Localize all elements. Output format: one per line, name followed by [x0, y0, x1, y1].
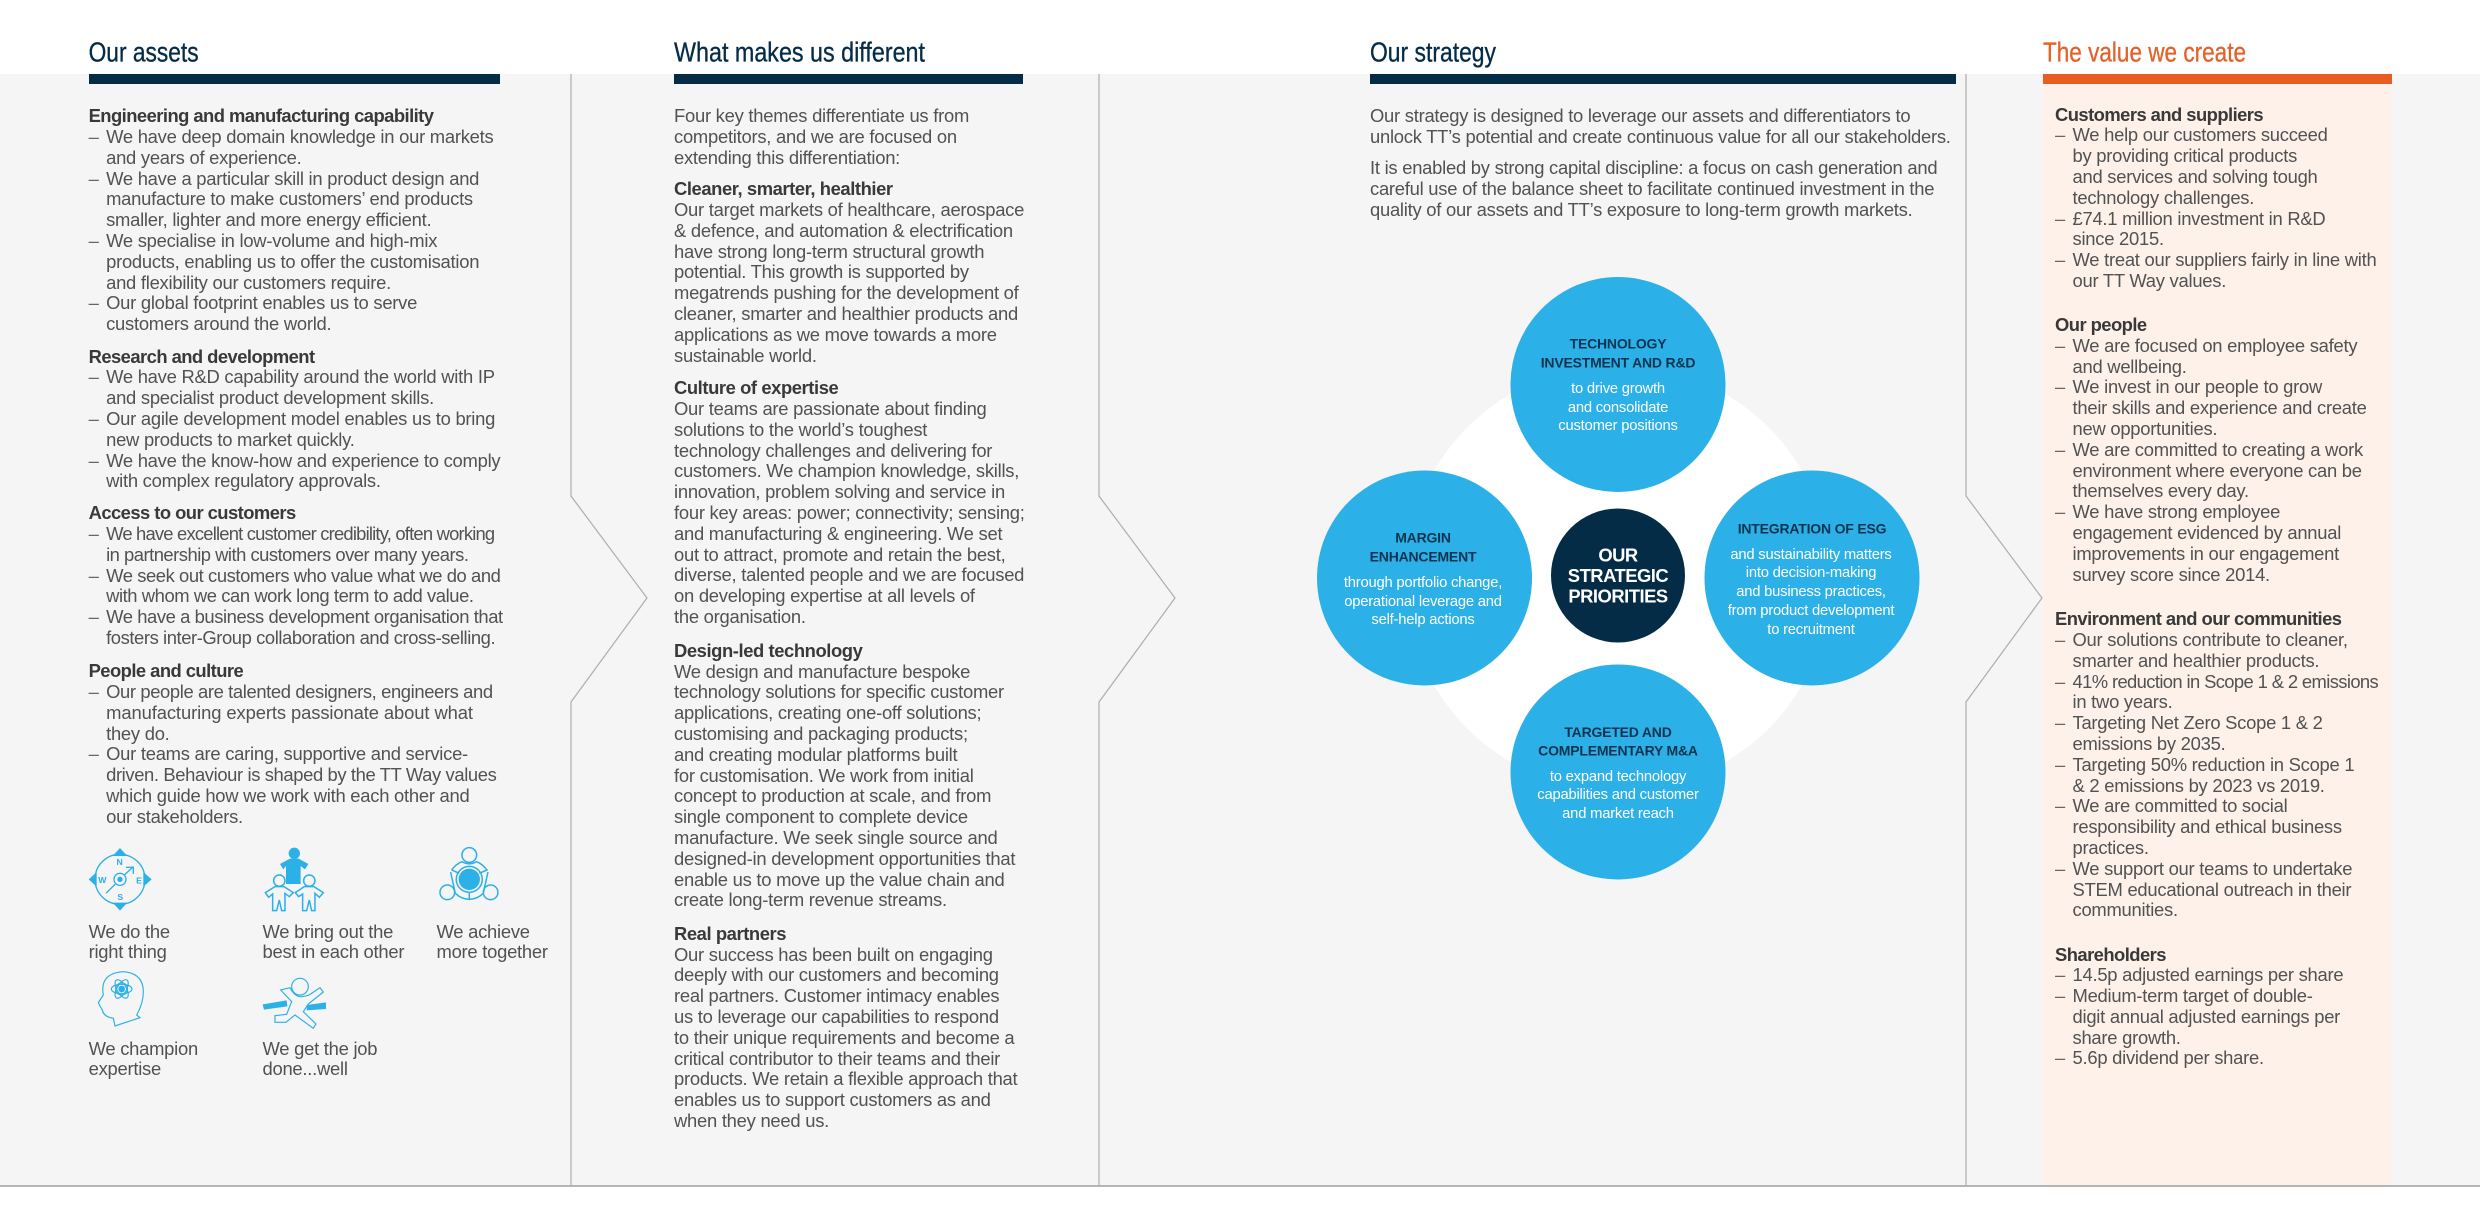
- centre: our strategic priorities: PRIORITIES: [1568, 586, 1668, 606]
- text block: cleaner, smarter, healthier: have strong long-term structural growth: [674, 241, 984, 262]
- text block: our people: –: [2055, 376, 2065, 397]
- caption: we get the job done well: We get the job: [262, 1038, 377, 1059]
- text block: our people: environment where everyone can be: [2072, 460, 2362, 481]
- text block: design-led technology: We design and manufacture bespoke: [674, 661, 970, 682]
- circle: technology investment: INVESTMENT AND R&D: [1541, 354, 1695, 370]
- text block: culture of expertise: on developing expertise at all levels of: [674, 585, 975, 606]
- text block: environment and our communities: –: [2055, 712, 2065, 733]
- text block: capital discipline: careful use of the balance sheet to facilitate continued investment in the: [1370, 178, 1934, 199]
- text block: people and culture: they do.: [106, 723, 170, 744]
- text block: strategy intro: [1370, 105, 1951, 147]
- text block: real partners: us to leverage our capabilities to respond: [674, 1006, 999, 1027]
- text block: shareholders: –: [2055, 1047, 2065, 1068]
- text block: culture of expertise: Our teams are passionate about finding: [674, 398, 987, 419]
- text block: design-led technology: create long-term revenue streams.: [674, 889, 947, 910]
- text block: culture of expertise: [674, 377, 1025, 627]
- text block: capital discipline: [1370, 157, 1937, 220]
- text block: real partners: products. We retain a flexible approach that: [674, 1068, 1017, 1089]
- caption: we achieve more together: more together: [436, 941, 548, 962]
- text block: real partners: deeply with our customers and becoming: [674, 964, 999, 985]
- text block: access to our customers: –: [89, 606, 98, 627]
- text block: people and culture: Our teams are caring, supportive and service-: [106, 743, 468, 764]
- caption: we achieve more together: [436, 921, 548, 962]
- text block: research and development: and specialist product development skills.: [106, 387, 434, 408]
- text block: environment and our communities: STEM educational outreach in their: [2072, 879, 2351, 900]
- text block: customers and suppliers: We treat our suppliers fairly in line with: [2072, 249, 2376, 270]
- text block: cleaner, smarter, healthier: megatrends pushing for the development of: [674, 282, 1019, 303]
- icon: compass: S: [117, 892, 123, 902]
- text block: cleaner, smarter, healthier: Our target markets of healthcare, aerospace: [674, 199, 1024, 220]
- text block: shareholders: 5.6p dividend per share.: [2072, 1047, 2264, 1068]
- text block: people and culture: [88, 660, 496, 827]
- circle: margin enhancement: self-help actions: [1371, 612, 1475, 628]
- text block: environment and our communities: –: [2055, 671, 2065, 692]
- text block: research and development: –: [89, 408, 99, 429]
- text block: people and culture: Our people are talented designers, engineers and: [106, 681, 493, 702]
- text block: access to our customers: Access to our customers: [89, 502, 296, 523]
- text block: design-led technology: single component to complete device: [674, 806, 968, 827]
- text block: real partners: to their unique requirements and become a: [674, 1027, 1014, 1048]
- circle: margin enhancement: [1317, 470, 1532, 686]
- text block: customers and suppliers: Customers and suppliers: [2055, 104, 2263, 125]
- text block: people and culture: driven. Behaviour is shaped by the TT Way values: [106, 764, 496, 785]
- icon: compass: W: [98, 875, 107, 885]
- text block: access to our customers: with whom we can work long term to add value.: [106, 585, 474, 606]
- text block: customers and suppliers: our TT Way values.: [2072, 270, 2226, 291]
- text block: environment and our communities: [2055, 608, 2378, 920]
- text block: research and development: Our agile development model enables us to bring: [106, 408, 495, 429]
- text block: environment and our communities: Targeting 50% reduction in Scope 1: [2072, 754, 2354, 775]
- text block: real partners: real partners. Customer intimacy enables: [674, 985, 999, 1006]
- text block: culture of expertise: customers. We champion knowledge, skills,: [674, 460, 1019, 481]
- circle: targeted m&a: to expand technology: [1550, 769, 1687, 785]
- text block: customers and suppliers: £74.1 million investment in R&D: [2072, 208, 2325, 229]
- text block: people and culture: which guide how we work with each other and: [106, 785, 470, 806]
- caption: we bring out the best in each other: best in each other: [262, 941, 404, 962]
- text block: customers and suppliers: by providing critical products: [2072, 145, 2297, 166]
- text block: engineering and manufacturing capability: We specialise in low-volume and high-mix: [106, 230, 437, 251]
- text block: engineering and manufacturing capability: –: [89, 230, 99, 251]
- circle: technology investment: [1510, 277, 1726, 492]
- text block: differentiators intro: extending this differentiation:: [674, 147, 900, 168]
- text block: our people: new opportunities.: [2072, 418, 2217, 439]
- text block: culture of expertise: diverse, talented people and we are focused: [674, 564, 1024, 585]
- text block: customers and suppliers: and services and solving tough: [2072, 166, 2318, 187]
- caption: we bring out the best in each other: We bring out the: [262, 921, 393, 942]
- text block: our people: engagement evidenced by annual: [2072, 522, 2341, 543]
- text block: engineering and manufacturing capability: [88, 105, 493, 334]
- text block: access to our customers: in partnership with customers over many years.: [106, 544, 468, 565]
- text block: our people: We have strong employee: [2072, 501, 2280, 522]
- heading: what makes us different: What makes us different: [674, 36, 925, 68]
- text block: access to our customers: We have a business development organisation that: [106, 606, 503, 627]
- text block: our people: –: [2055, 335, 2065, 356]
- text block: cleaner, smarter, healthier: [674, 178, 1024, 366]
- text block: culture of expertise: innovation, problem solving and service in: [674, 481, 1005, 502]
- text block: people and culture: manufacturing experts passionate about what: [106, 702, 473, 723]
- circle: integration of esg: and sustainability matters: [1730, 547, 1892, 563]
- text block: engineering and manufacturing capability: customers around the world.: [106, 313, 331, 334]
- text block: our people: –: [2055, 439, 2065, 460]
- caption: we do the right thing: [88, 921, 170, 962]
- text block: our people: We invest in our people to grow: [2072, 376, 2322, 397]
- circle: margin enhancement: ENHANCEMENT: [1370, 548, 1477, 564]
- header bar: our assets: [89, 74, 500, 84]
- text block: engineering and manufacturing capability: We have a particular skill in product design and: [106, 168, 479, 189]
- text block: engineering and manufacturing capability: and years of experience.: [106, 147, 302, 168]
- text block: people and culture: People and culture: [89, 660, 243, 681]
- text block: differentiators intro: Four key themes differentiate us from: [674, 105, 969, 126]
- text block: engineering and manufacturing capability: manufacture to make customers’ end products: [106, 188, 473, 209]
- text block: access to our customers: We have excellent customer credibility, often working: [106, 523, 494, 544]
- text block: our people: survey score since 2014.: [2072, 564, 2270, 585]
- circle: integration of esg: from product development: [1728, 603, 1894, 619]
- text block: culture of expertise: out to attract, promote and retain the best,: [674, 544, 1005, 565]
- text block: customers and suppliers: –: [2055, 124, 2065, 145]
- text block: research and development: We have the know-how and experience to comply: [106, 450, 500, 471]
- text block: capital discipline: It is enabled by strong capital discipline: a focus on cash generation and: [1370, 157, 1937, 178]
- text block: cleaner, smarter, healthier: & defence, and automation & electrification: [674, 220, 1013, 241]
- text block: research and development: with complex regulatory approvals.: [106, 470, 381, 491]
- centre: our strategic priorities: STRATEGIC: [1568, 565, 1668, 586]
- circle: margin enhancement: MARGIN: [1395, 530, 1451, 546]
- text block: our people: and wellbeing.: [2072, 356, 2187, 377]
- text block: environment and our communities: Targeting Net Zero Scope 1 & 2: [2072, 712, 2323, 733]
- text block: research and development: [88, 346, 500, 491]
- text block: design-led technology: [674, 640, 1016, 910]
- circle: targeted m&a: COMPLEMENTARY M&A: [1538, 742, 1698, 758]
- text block: cleaner, smarter, healthier: potential. This growth is supported by: [674, 261, 969, 282]
- text block: environment and our communities: Our solutions contribute to cleaner,: [2072, 629, 2348, 650]
- text block: shareholders: –: [2055, 985, 2065, 1006]
- text block: environment and our communities: We support our teams to undertake: [2072, 858, 2352, 879]
- text block: engineering and manufacturing capability: –: [89, 292, 99, 313]
- text block: real partners: critical contributor to their teams and their: [674, 1048, 1000, 1069]
- text block: customers and suppliers: We help our customers succeed: [2072, 124, 2328, 145]
- text block: customers and suppliers: since 2015.: [2072, 228, 2164, 249]
- text block: environment and our communities: –: [2055, 629, 2065, 650]
- text block: cleaner, smarter, healthier: applications as we move towards a more: [674, 324, 997, 345]
- text block: our people: –: [2055, 501, 2065, 522]
- text block: customers and suppliers: [2055, 104, 2376, 291]
- text block: cleaner, smarter, healthier: sustainable world.: [674, 345, 817, 366]
- text block: culture of expertise: solutions to the world’s toughest: [674, 419, 927, 440]
- text block: design-led technology: technology solutions for specific customer: [674, 681, 1004, 702]
- text block: engineering and manufacturing capability: products, enabling us to offer the customisation: [106, 251, 479, 272]
- text block: design-led technology: and creating modular platforms built: [674, 744, 957, 765]
- text block: access to our customers: –: [89, 523, 98, 544]
- caption: we get the job done well: done...well: [262, 1058, 348, 1079]
- text block: strategy intro: Our strategy is designed to leverage our assets and differentiators to: [1370, 105, 1910, 126]
- text block: design-led technology: designed-in development opportunities that: [674, 848, 1015, 869]
- caption: we do the right thing: right thing: [89, 941, 167, 962]
- text block: capital discipline: quality of our assets and TT’s exposure to long-term growth markets.: [1370, 199, 1912, 220]
- text block: engineering and manufacturing capability: and flexibility our customers require.: [106, 272, 391, 293]
- panel: value tint: [2042, 84, 2392, 1185]
- centre: our strategic priorities: OUR: [1598, 544, 1638, 566]
- text block: environment and our communities: communities.: [2072, 899, 2178, 920]
- circle: targeted m&a: and market reach: [1562, 806, 1674, 822]
- text block: our people: We are committed to creating a work: [2072, 439, 2363, 460]
- caption: we do the right thing: We do the: [89, 921, 170, 942]
- text block: engineering and manufacturing capability: Engineering and manufacturing capability: [89, 105, 433, 126]
- text block: cleaner, smarter, healthier: cleaner, smarter and healthier products and: [674, 303, 1018, 324]
- circle: targeted m&a: [1510, 664, 1726, 880]
- text block: people and culture: our stakeholders.: [106, 806, 243, 827]
- text block: culture of expertise: four key areas: power; connectivity; sensing;: [674, 502, 1025, 523]
- text block: environment and our communities: –: [2055, 754, 2065, 775]
- circle: technology investment: customer positions: [1558, 418, 1678, 434]
- circle: integration of esg: into decision-making: [1746, 565, 1876, 581]
- text block: environment and our communities: smarter and healthier products.: [2072, 650, 2319, 671]
- text block: access to our customers: fosters inter-Group collaboration and cross-selling.: [106, 627, 495, 648]
- text block: shareholders: Medium-term target of double-: [2072, 985, 2313, 1006]
- header bar: our strategy: [1370, 74, 1956, 84]
- text block: environment and our communities: We are committed to social: [2072, 795, 2287, 816]
- heading: our assets: Our assets: [89, 36, 199, 68]
- text block: differentiators intro: competitors, and we are focused on: [674, 126, 957, 147]
- text block: real partners: enables us to support customers as and: [674, 1089, 991, 1110]
- icon: compass: N: [117, 857, 123, 867]
- circle: targeted m&a: TARGETED AND: [1564, 724, 1672, 740]
- heading: our strategy: Our strategy: [1370, 36, 1496, 68]
- text block: design-led technology: enable us to move up the value chain and: [674, 869, 1004, 890]
- text block: environment and our communities: –: [2055, 858, 2065, 879]
- circle: integration of esg: INTEGRATION OF ESG: [1738, 520, 1887, 536]
- centre: our strategic priorities: [1551, 508, 1685, 642]
- text block: people and culture: –: [89, 743, 99, 764]
- circle: technology investment: TECHNOLOGY: [1570, 336, 1667, 352]
- text block: design-led technology: Design-led technology: [674, 640, 862, 661]
- caption: we champion expertise: expertise: [89, 1058, 161, 1079]
- text block: our people: improvements in our engagement: [2072, 543, 2339, 564]
- text block: environment and our communities: emissions by 2035.: [2072, 733, 2225, 754]
- text block: shareholders: 14.5p adjusted earnings per share: [2072, 964, 2343, 985]
- text block: shareholders: –: [2055, 964, 2065, 985]
- text block: environment and our communities: responsibility and ethical business: [2072, 816, 2342, 837]
- caption: we bring out the best in each other: [262, 921, 404, 962]
- text block: environment and our communities: Environment and our communities: [2055, 608, 2341, 629]
- text block: culture of expertise: technology challenges and delivering for: [674, 440, 992, 461]
- circle: technology investment: and consolidate: [1568, 400, 1668, 416]
- text block: our people: themselves every day.: [2072, 480, 2249, 501]
- text block: shareholders: share growth.: [2072, 1027, 2181, 1048]
- text block: environment and our communities: –: [2055, 795, 2065, 816]
- caption: we champion expertise: We champion: [89, 1038, 198, 1059]
- text block: environment and our communities: in two years.: [2072, 691, 2172, 712]
- text block: our people: We are focused on employee safety: [2072, 335, 2357, 356]
- text block: our people: [2055, 314, 2367, 585]
- text block: culture of expertise: Culture of expertise: [674, 377, 838, 398]
- text block: engineering and manufacturing capability: We have deep domain knowledge in our markets: [106, 126, 493, 147]
- text block: strategy intro: unlock TT’s potential and create continuous value for all our stakeholders.: [1370, 126, 1951, 147]
- text block: environment and our communities: practices.: [2072, 837, 2149, 858]
- text block: shareholders: [2055, 944, 2343, 1068]
- text block: design-led technology: customising and packaging products;: [674, 723, 968, 744]
- text block: access to our customers: –: [89, 565, 98, 586]
- caption: we champion expertise: [88, 1038, 198, 1079]
- text block: our people: Our people: [2055, 314, 2147, 335]
- icon: compass: E: [136, 875, 142, 885]
- caption: we achieve more together: We achieve: [436, 921, 530, 942]
- text block: design-led technology: manufacture. We seek single source and: [674, 827, 997, 848]
- text block: access to our customers: We seek out customers who value what we do and: [106, 565, 500, 586]
- text block: environment and our communities: 41% reduction in Scope 1 & 2 emissions: [2072, 671, 2378, 692]
- text block: our people: their skills and experience and create: [2072, 397, 2367, 418]
- text block: culture of expertise: and manufacturing & engineering. We set: [674, 523, 1002, 544]
- text block: design-led technology: for customisation. We work from initial: [674, 765, 974, 786]
- text block: real partners: Our success has been built on engaging: [674, 944, 993, 965]
- text block: access to our customers: [88, 502, 503, 648]
- text block: environment and our communities: & 2 emissions by 2023 vs 2019.: [2072, 775, 2325, 796]
- heading: the value we create: The value we create: [2043, 36, 2246, 68]
- text block: people and culture: –: [89, 681, 99, 702]
- circle: targeted m&a: capabilities and customer: [1537, 787, 1699, 803]
- text block: customers and suppliers: –: [2055, 208, 2065, 229]
- text block: culture of expertise: the organisation.: [674, 606, 806, 627]
- text block: research and development: Research and development: [89, 346, 315, 367]
- circle: margin enhancement: through portfolio change,: [1344, 575, 1502, 591]
- circle: integration of esg: to recruitment: [1767, 622, 1855, 638]
- header bar: value we create: [2042, 74, 2392, 84]
- text block: shareholders: digit annual adjusted earnings per: [2072, 1006, 2340, 1027]
- text block: customers and suppliers: –: [2055, 249, 2065, 270]
- text block: shareholders: Shareholders: [2055, 944, 2166, 964]
- text block: research and development: We have R&D capability around the world with IP: [106, 366, 495, 387]
- text block: differentiators intro: [674, 105, 969, 168]
- text block: design-led technology: applications, creating one-off solutions;: [674, 702, 981, 723]
- text block: real partners: Real partners: [674, 923, 786, 944]
- text block: research and development: –: [89, 366, 99, 387]
- text block: research and development: new products to market quickly.: [106, 429, 355, 450]
- text block: design-led technology: concept to production at scale, and from: [674, 785, 991, 806]
- circle: technology investment: to drive growth: [1571, 381, 1665, 397]
- text block: real partners: when they need us.: [674, 1110, 829, 1131]
- circle: margin enhancement: operational leverage and: [1344, 594, 1502, 610]
- text block: real partners: [674, 923, 1018, 1131]
- circle: integration of esg: and business practices,: [1736, 584, 1886, 600]
- text block: customers and suppliers: technology challenges.: [2072, 187, 2254, 208]
- caption: we get the job done well: [262, 1038, 377, 1079]
- text block: research and development: –: [89, 450, 99, 471]
- text block: engineering and manufacturing capability: Our global footprint enables us to serve: [106, 292, 417, 313]
- text block: engineering and manufacturing capability: –: [89, 126, 99, 147]
- circle: integration of esg: [1704, 470, 1920, 686]
- text block: engineering and manufacturing capability: smaller, lighter and more energy efficient.: [106, 209, 431, 230]
- text block: engineering and manufacturing capability: –: [89, 168, 99, 189]
- header bar: what makes us different: [674, 74, 1023, 84]
- text block: cleaner, smarter, healthier: Cleaner, smarter, healthier: [674, 178, 893, 199]
